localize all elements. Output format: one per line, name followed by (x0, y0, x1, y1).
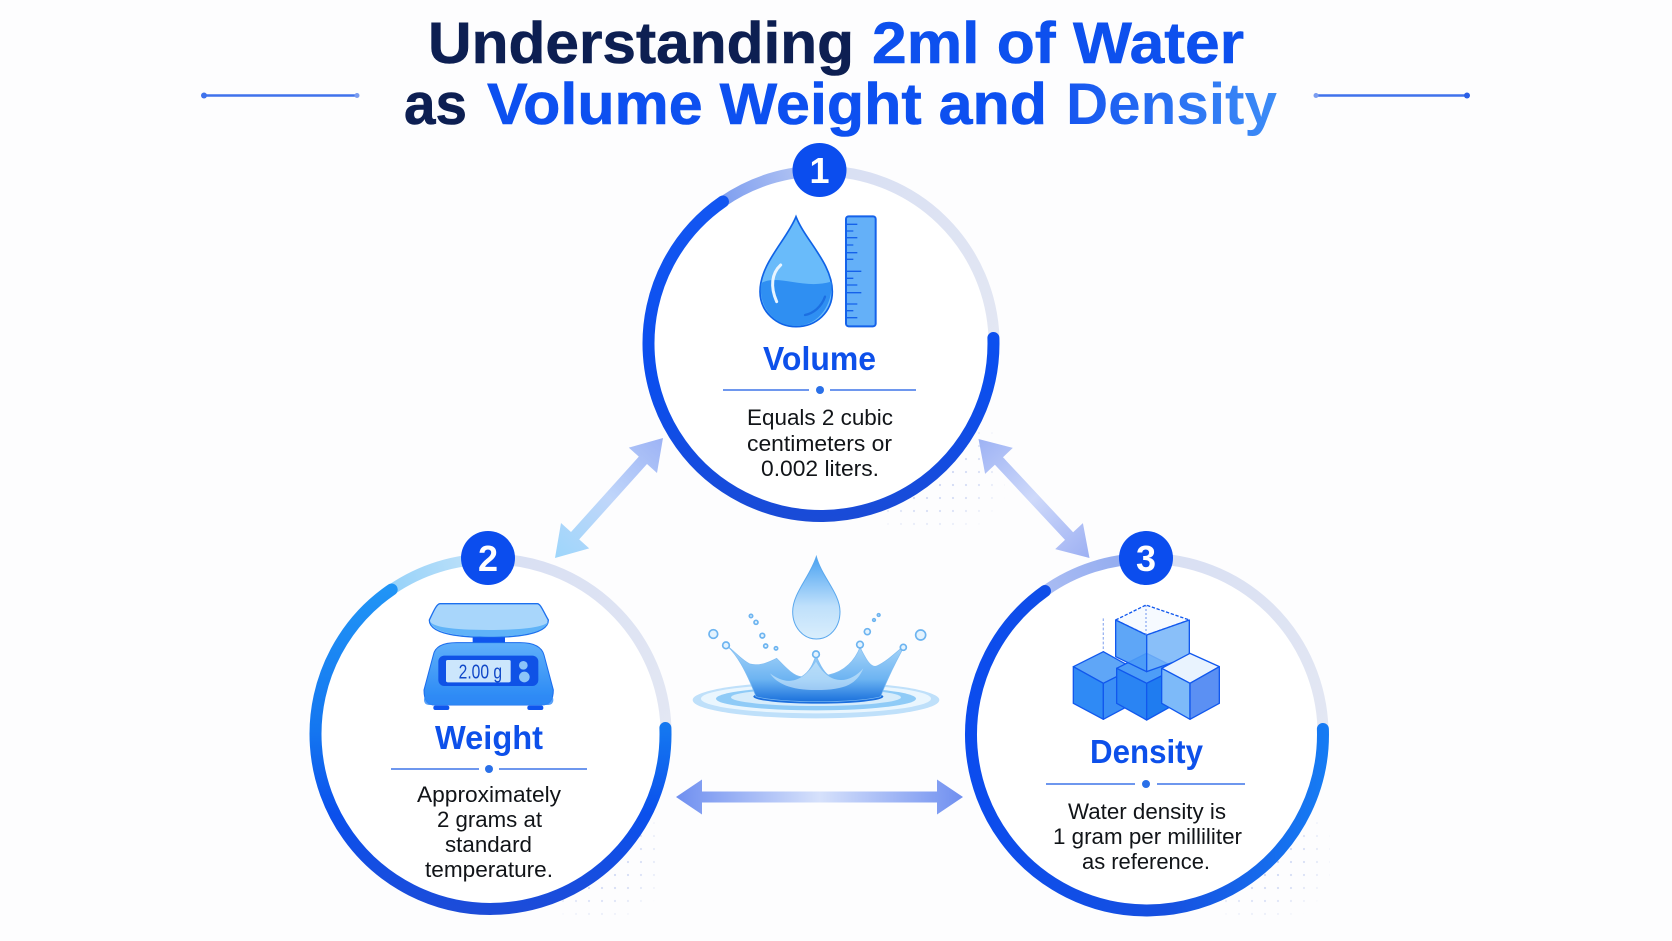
falling drop (793, 557, 840, 639)
ring 3 (971, 558, 1323, 910)
body: weight: Approximately (417, 782, 561, 807)
body: volume: 0.002 liters. (761, 456, 879, 481)
body: density (1053, 799, 1242, 874)
title: 2ml of Water (872, 11, 1244, 76)
badge 2 (461, 531, 515, 585)
badge 3: 3 (1136, 538, 1156, 579)
ring 1 (648, 171, 994, 516)
panel: volume (648, 143, 994, 516)
icon: water drop (760, 217, 832, 327)
body: density: Water density is (1068, 799, 1226, 824)
arrow: weight to density (676, 780, 963, 814)
halftone dots decoration (530, 405, 1330, 920)
title: Density (1066, 72, 1277, 137)
title (404, 11, 1277, 137)
badge 2: 2 (478, 538, 498, 579)
body: volume: Equals 2 cubic (747, 405, 893, 430)
badge 1: 1 (809, 150, 830, 191)
body: weight (417, 782, 561, 882)
arrow: volume to weight (555, 438, 663, 558)
heading: density: Density (1090, 733, 1204, 770)
panel: density (971, 531, 1323, 910)
title rule right (1314, 92, 1470, 98)
body: weight: standard (445, 832, 532, 857)
icon: ruler (846, 216, 876, 326)
body: density: as reference. (1082, 849, 1210, 874)
icon: water splash (693, 557, 939, 718)
body: weight: temperature. (425, 857, 553, 882)
heading: volume: Volume (763, 340, 876, 377)
title: Volume Weight and (487, 72, 1047, 137)
crown highlights (770, 662, 863, 690)
crown (727, 645, 905, 702)
droplets (709, 614, 926, 658)
divider (1046, 780, 1245, 788)
badge 1 (792, 143, 846, 197)
ring 2 (316, 559, 666, 909)
body: volume (747, 405, 893, 481)
title: as (404, 72, 467, 137)
puddle (693, 682, 939, 718)
title: Understanding (428, 11, 854, 76)
body: density: 1 gram per milliliter (1053, 824, 1242, 849)
divider (723, 386, 916, 394)
arrow: volume to density (978, 439, 1090, 558)
icon: scale (424, 604, 553, 710)
body: volume: centimeters or (747, 431, 892, 456)
panel: weight (316, 531, 666, 909)
title rule left (201, 92, 360, 98)
icon: cubes (1073, 605, 1219, 720)
badge 3 (1119, 531, 1173, 585)
divider (391, 765, 587, 773)
body: weight: 2 grams at (437, 807, 542, 832)
heading: weight: Weight (435, 719, 543, 756)
icon: scale: 2.00 g (459, 661, 502, 683)
